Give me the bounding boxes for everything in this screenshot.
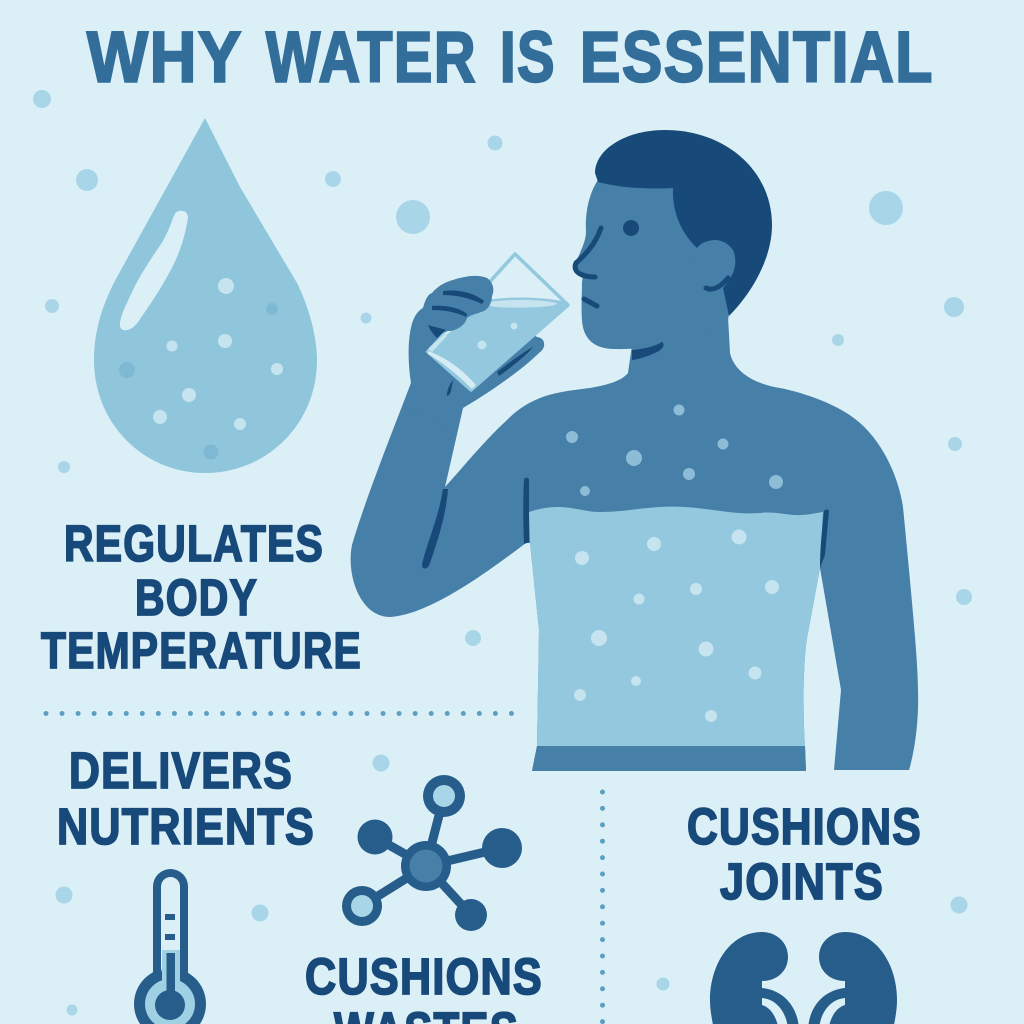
fingers: [410, 276, 493, 360]
torso and arms: [351, 317, 918, 771]
waist band: [532, 746, 806, 771]
title: IS: [500, 18, 556, 98]
title: ESSENTIAL: [580, 18, 934, 98]
head: [575, 170, 740, 349]
water inside torso: [529, 507, 823, 746]
finger lines: [428, 290, 484, 338]
icon: kidneys: [710, 932, 897, 1024]
bubbles in water: [574, 530, 779, 722]
title: [87, 18, 934, 98]
label: delivers nutrients: [57, 742, 315, 855]
label: cushions wastes: CUSHIONS: [305, 948, 543, 1005]
dotted divider: vertical: [600, 792, 605, 1024]
icon: thermometer: [134, 869, 206, 1024]
bubbles in chest: [566, 404, 783, 496]
icon: molecule: [342, 775, 522, 931]
label: regulates body temperature: REGULATES: [64, 515, 324, 572]
label: cushions joints: [687, 798, 922, 910]
thumb and wrist creases: [447, 347, 533, 396]
icon: water drop: [94, 118, 317, 473]
dotted divider: horizontal: [46, 711, 512, 716]
label: cushions wastes: [305, 948, 543, 1024]
left kidney: [710, 932, 799, 1024]
label: cushions joints: JOINTS: [720, 853, 884, 910]
right kidney: [808, 932, 897, 1024]
hair: [595, 130, 772, 316]
nose, mouth and ear lines: [575, 228, 728, 306]
neck shadow: [632, 342, 664, 360]
label: cushions joints: CUSHIONS: [687, 798, 922, 855]
glass: [427, 254, 568, 390]
torso and arm crease lines: [422, 478, 829, 569]
title: WHY: [87, 18, 243, 98]
label: regulates body temperature: TEMPERATURE: [41, 622, 362, 679]
label: delivers nutrients: DELIVERS: [69, 742, 293, 799]
figure: person drinking water: [351, 130, 918, 771]
ear: [695, 240, 735, 280]
eye: [623, 220, 639, 236]
title: WATER: [266, 18, 477, 98]
label: regulates body temperature: BODY: [135, 569, 258, 626]
hand back and thumb behind glass: [403, 300, 544, 430]
label: delivers nutrients: NUTRIENTS: [57, 798, 315, 855]
label: regulates body temperature: [41, 515, 362, 679]
